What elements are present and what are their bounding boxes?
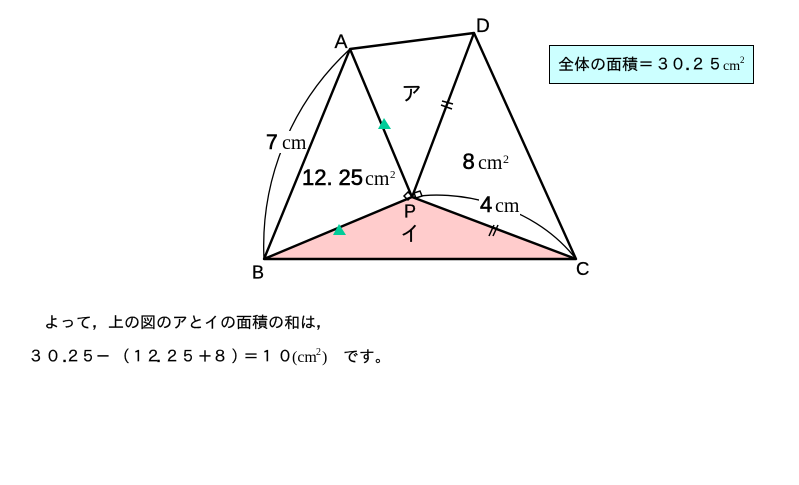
area 8cm2: 2 — [503, 152, 509, 166]
equal length tick on PC — [489, 225, 498, 236]
callout box — [550, 46, 754, 84]
equal length tick on PD — [441, 101, 453, 109]
callout text: 全体の面積＝３０.２５ — [558, 56, 723, 72]
explanation line 2 ending: です。 — [343, 348, 391, 364]
area 12.25cm2: 25 — [338, 165, 363, 190]
callout unit: 2 — [740, 55, 744, 65]
explanation line 1: よって，上の図のアとイの面積の和は， — [44, 314, 332, 330]
vertex A: A — [334, 31, 348, 53]
length 4cm: cm — [495, 195, 520, 217]
region ア: ア — [401, 83, 422, 104]
length 4cm: 4 — [480, 192, 492, 217]
explanation line 2 unit: (cm — [292, 349, 317, 366]
area 8cm2: 8 — [462, 149, 475, 174]
area 12.25cm2: 12. — [302, 165, 333, 190]
label gap 7cm — [266, 131, 306, 153]
arc from A to B — [264, 49, 350, 259]
equal angle marker lower — [333, 224, 346, 235]
area 12.25cm2: 2 — [390, 169, 396, 181]
region イ: イ — [400, 223, 421, 244]
area 8cm2: cm — [478, 152, 503, 174]
shaded triangle イ — [264, 197, 576, 259]
explanation text — [28, 314, 391, 366]
label gap 4cm — [479, 196, 520, 215]
explanation line 2 unit: 2 — [316, 347, 321, 358]
explanation line 2 formula: ３０.２５－（１２.２５＋８）＝１０ — [28, 348, 293, 364]
vertex B: B — [252, 262, 264, 282]
length 7cm: 7 — [266, 131, 278, 154]
quadrilateral outline — [264, 33, 576, 259]
vertex P: P — [404, 202, 416, 222]
right angle mark right — [414, 191, 422, 198]
area 12.25cm2: cm — [365, 168, 390, 190]
callout unit: cm — [723, 59, 740, 74]
total area callout — [550, 46, 754, 84]
geometry diagram — [252, 16, 589, 282]
vertex C: C — [576, 258, 589, 279]
equal angle marker upper — [378, 118, 391, 129]
length 7cm: cm — [282, 132, 307, 154]
right angle mark left — [404, 192, 412, 200]
explanation line 2 unit: ) — [322, 349, 327, 366]
vertex D: D — [476, 16, 490, 37]
arc from P to C — [414, 195, 576, 259]
